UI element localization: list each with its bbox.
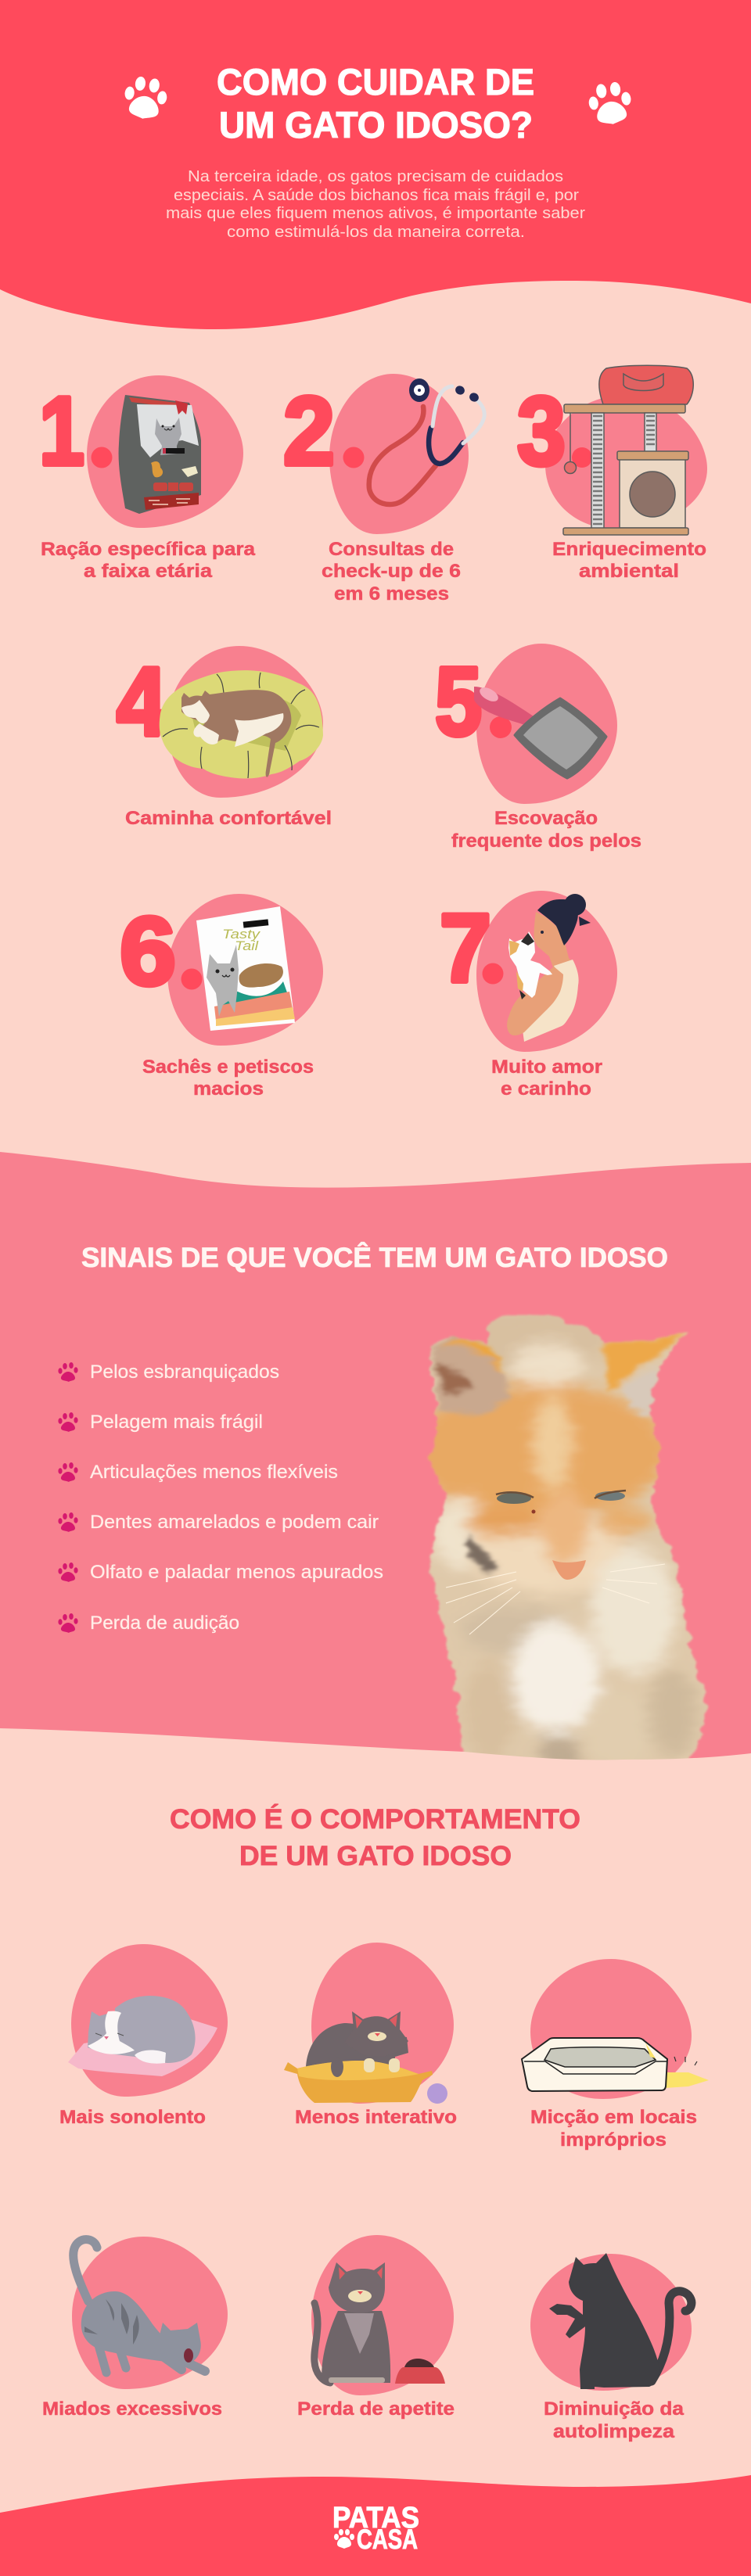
behaviour: miados (42, 2237, 228, 2420)
photo: old orange cat (427, 1314, 709, 1760)
icon: sleeping cat (68, 1996, 217, 2076)
item: pelagem: Pelagem mais frágil (90, 1412, 263, 1433)
icon: brush (474, 684, 606, 778)
cat nose (552, 1560, 586, 1580)
panel: sinais band (0, 1152, 751, 1799)
item 7: amor (440, 891, 617, 1100)
label: interativo: Menos interativo (295, 2107, 457, 2128)
intro text (166, 167, 585, 241)
icon: black cat licking paw (549, 2253, 692, 2389)
item: dentes: Dentes amarelados e podem cair (90, 1512, 379, 1533)
label: consultas: Consultas de (329, 539, 454, 560)
item 5: escovação: 5 (435, 648, 482, 756)
heading: comportamento (170, 1803, 580, 1871)
label: sachês: Sachês e petiscos (142, 1057, 314, 1078)
list: sinais (58, 1362, 383, 1634)
icon: cat tree (563, 365, 693, 535)
icon: pouch (196, 906, 295, 1031)
label: enriquecimento (552, 539, 706, 582)
panel: comportamento background (0, 1728, 751, 2576)
label: ração (41, 539, 256, 582)
item 7: amor: 7 (440, 895, 491, 1003)
icon: fluffy cat on cushion (284, 2011, 447, 2104)
behaviour: autolimpeza (530, 2253, 692, 2442)
heading: sinais: SINAIS DE QUE VOCÊ TEM UM GATO IDOSO (81, 1242, 668, 1273)
title (217, 61, 534, 145)
icon: right paw (587, 80, 634, 127)
label: consultas (322, 539, 461, 605)
label: autolimpeza: autolimpeza (553, 2421, 675, 2442)
item 3: enriquecimento: 3 (517, 378, 566, 486)
item 2: consultas: 2 (283, 378, 335, 486)
label: amor: e carinho (501, 1078, 591, 1100)
logo: patas da casa (332, 2502, 419, 2555)
label: apetite: Perda de apetite (297, 2398, 455, 2420)
title: COMO CUIDAR DE (217, 61, 534, 102)
icon: stethoscope (369, 379, 484, 504)
label: autolimpeza: Diminuição da (544, 2398, 685, 2420)
cat eyes (496, 1491, 626, 1514)
label: caminha: Caminha confortável (125, 808, 332, 829)
item 4: caminha (117, 646, 332, 829)
item 6: sachês: 6 (120, 898, 176, 1006)
title: UM GATO IDOSO? (219, 104, 533, 145)
icon: meowing cat (74, 2240, 205, 2373)
item 2: consultas (283, 374, 484, 605)
label: amor (491, 1057, 602, 1100)
item 5: escovação (435, 644, 641, 852)
label: escovação: Escovação (494, 808, 598, 829)
label: consultas: em 6 meses (334, 583, 449, 605)
item 6: sachês (120, 894, 323, 1100)
label: escovação: frequente dos pelos (451, 831, 641, 852)
icon: cat on bed (160, 670, 323, 778)
footer band (0, 2475, 751, 2576)
label: enriquecimento: ambiental (579, 561, 679, 582)
icon: left paw (122, 74, 169, 121)
item 4: caminha: 4 (117, 648, 167, 756)
heading: comportamento: DE UM GATO IDOSO (239, 1841, 512, 1871)
icon: pouch: Tasty (222, 927, 261, 942)
icon: litter box (522, 2038, 709, 2091)
intro text: como estimulá-los da maneira correta. (227, 223, 525, 241)
label: miados: Miados excessivos (42, 2398, 222, 2420)
item: pelos: Pelos esbranquiçados (90, 1362, 279, 1383)
intro text: mais que eles fiquem menos ativos, é importante saber (166, 204, 585, 222)
heading: comportamento: COMO É O COMPORTAMENTO (170, 1803, 580, 1835)
label: amor: Muito amor (491, 1057, 602, 1078)
icon: pouch: Tail (235, 938, 259, 953)
item 1: ração (39, 375, 256, 582)
behaviour: micção (522, 1959, 709, 2151)
label: micção: impróprios (560, 2129, 667, 2151)
label: sachês: macios (193, 1078, 264, 1100)
intro text: especiais. A saúde dos bichanos fica mais frágil e, por (174, 186, 579, 204)
label: consultas: check-up de 6 (322, 561, 461, 582)
cat whiskers (446, 1564, 665, 1634)
label: micção: Micção em locais (530, 2107, 697, 2128)
item: audição: Perda de audição (90, 1613, 239, 1634)
logo: patas da casa: PATAS (332, 2502, 419, 2535)
icon: food bag (119, 395, 201, 514)
item 1: ração: 1 (39, 378, 84, 486)
label: ração: a faixa etária (84, 561, 213, 582)
logo: patas da casa: CASA (357, 2524, 418, 2555)
behaviour: sonolento (59, 1944, 228, 2128)
behaviour: apetite (297, 2235, 455, 2420)
item 3: enriquecimento (517, 365, 707, 582)
label: autolimpeza (544, 2398, 685, 2442)
header band (0, 0, 751, 329)
label: sonolento: Mais sonolento (59, 2107, 206, 2128)
label: ração: Ração específica para (41, 539, 256, 560)
intro text: Na terceira idade, os gatos precisam de cuidados (188, 167, 563, 185)
icon: woman with cat (507, 894, 591, 1042)
label: escovação (451, 808, 641, 852)
label: enriquecimento: Enriquecimento (552, 539, 706, 560)
behaviour: interativo (284, 1943, 457, 2128)
label: micção (530, 2107, 697, 2151)
icon: sitting cat and bowl (314, 2262, 445, 2384)
item: articulações: Articulações menos flexíveis (90, 1462, 338, 1483)
label: sachês (142, 1057, 314, 1100)
item: olfato: Olfato e paladar menos apurados (90, 1562, 383, 1583)
